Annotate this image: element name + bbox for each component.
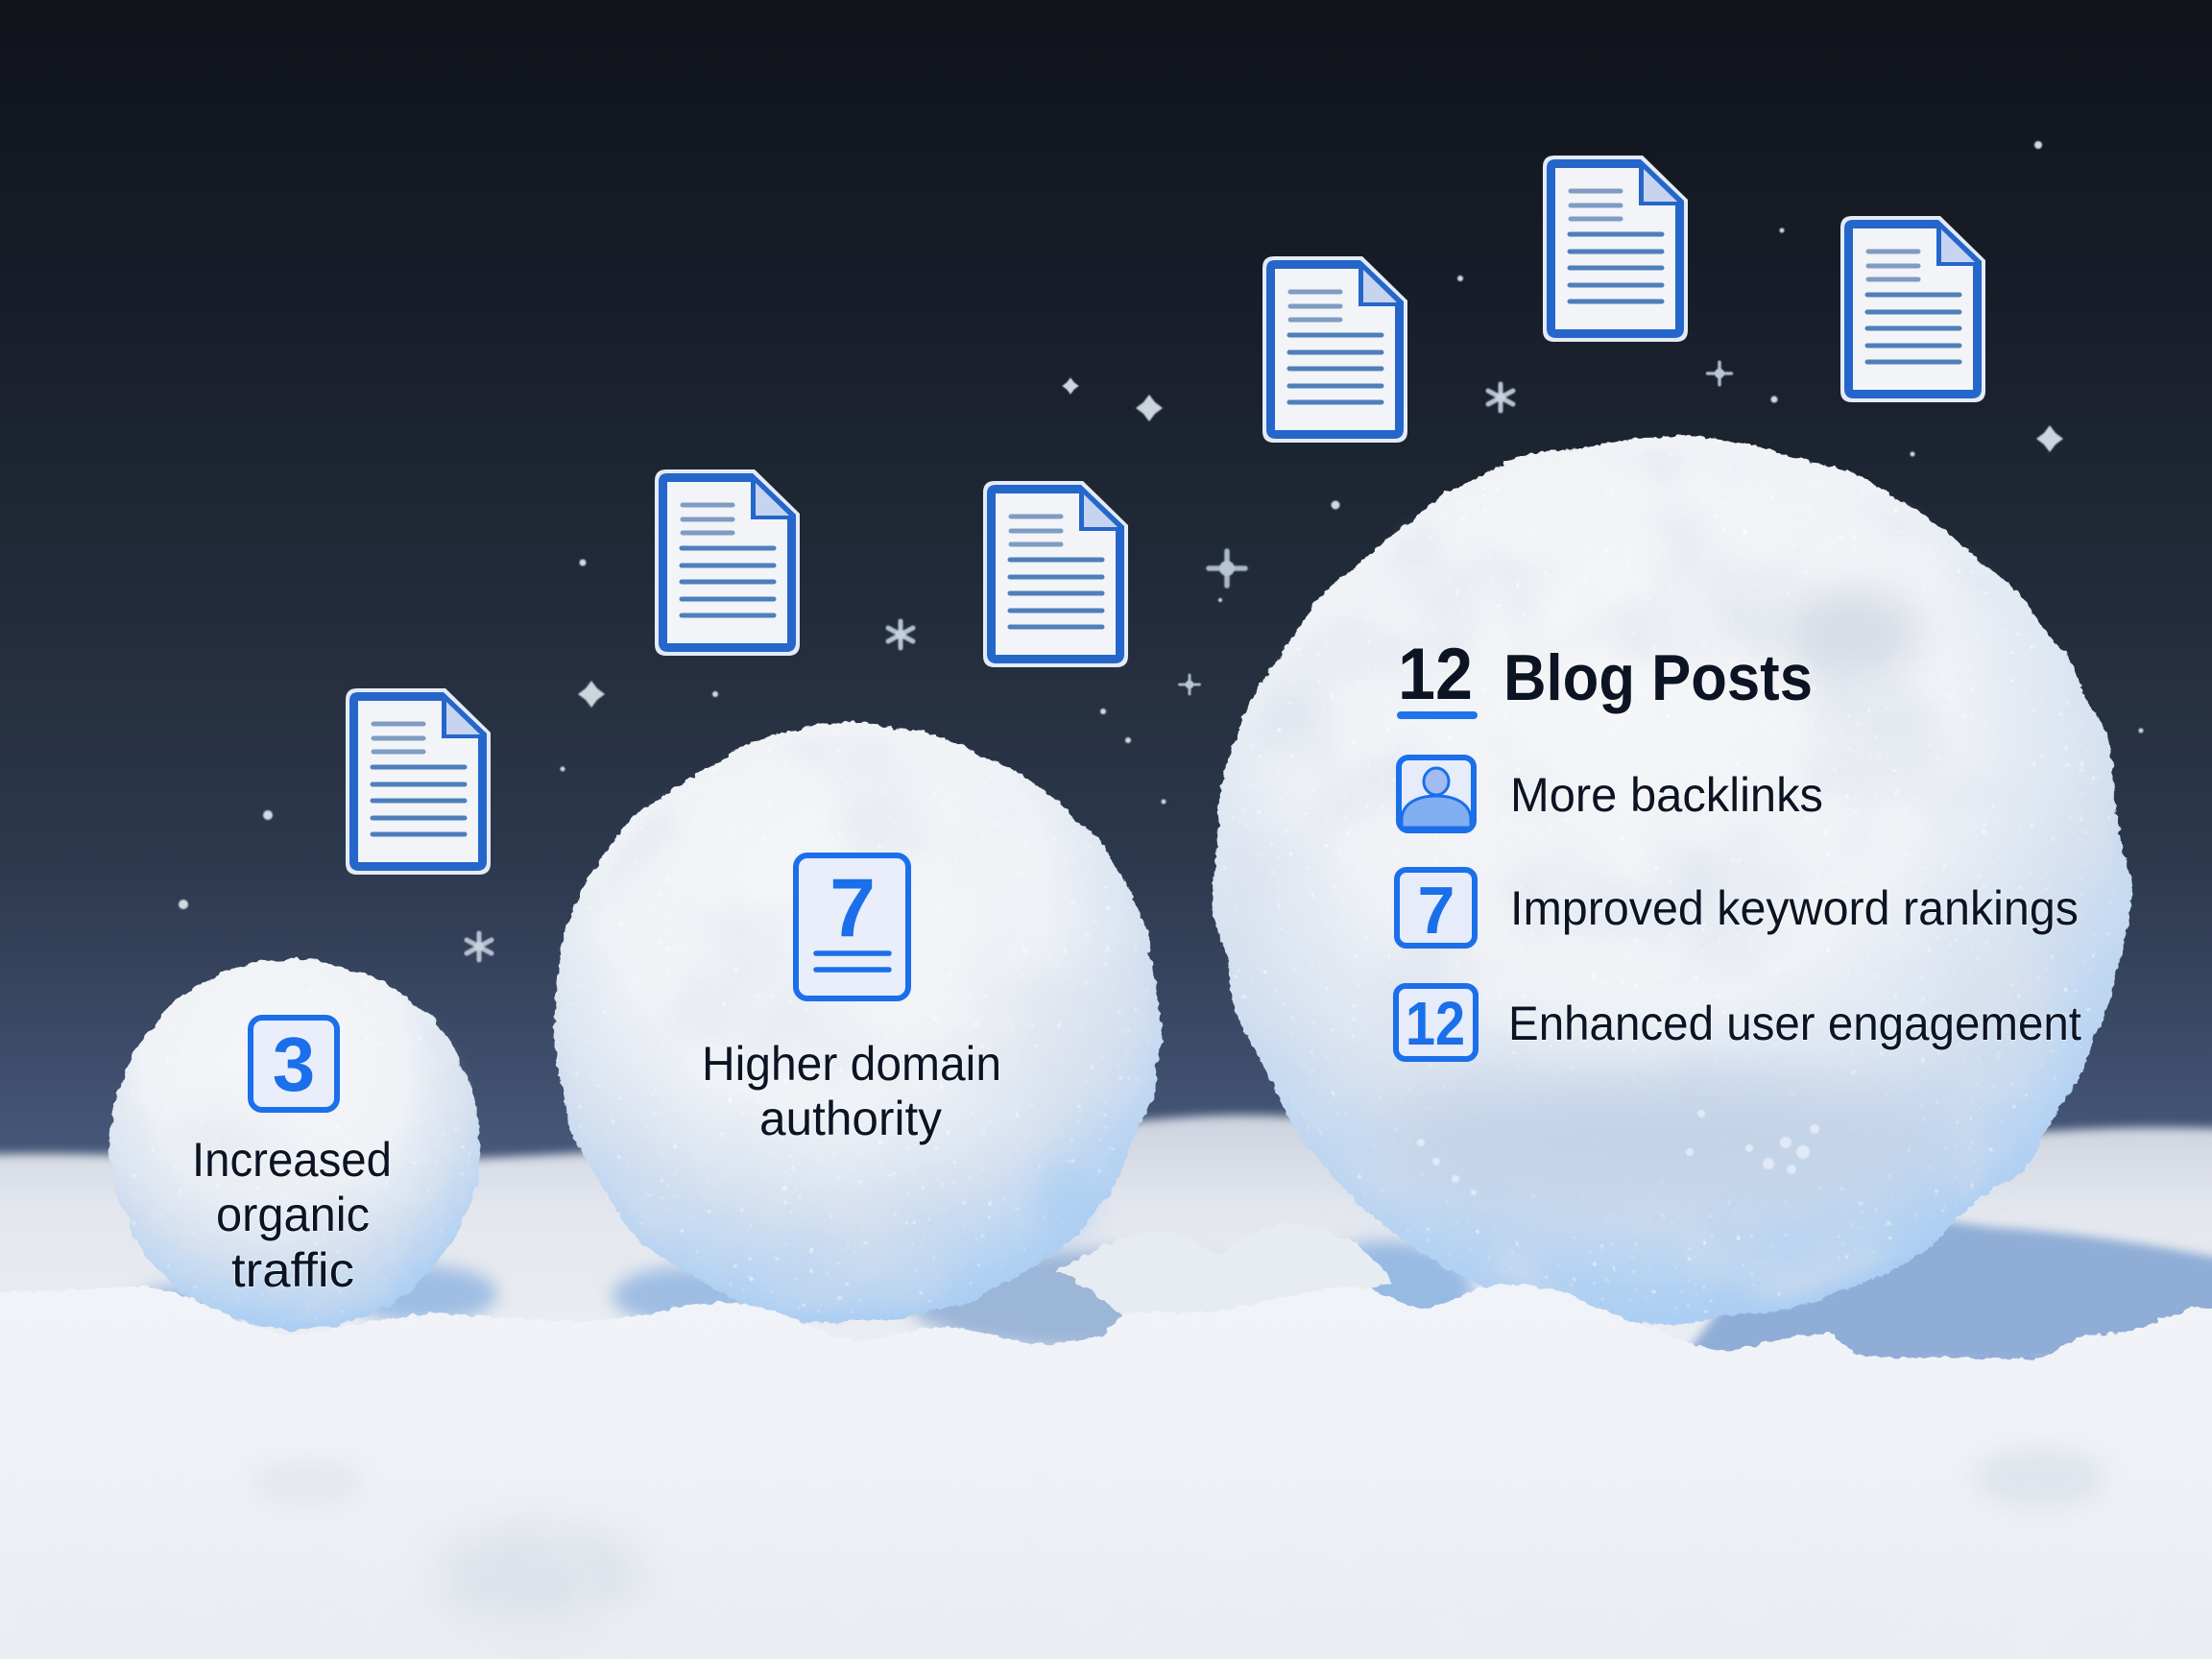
icon: document 1	[346, 688, 491, 875]
callout: small snowball label	[192, 1018, 392, 1297]
foreground snow drift	[0, 1285, 2212, 1659]
mid snow mound	[1056, 1224, 1392, 1325]
item: more backlinks	[1399, 757, 1823, 830]
panel: large snowball content	[1396, 634, 2081, 1059]
text: higher domain authority: Higher domain	[702, 1037, 1001, 1091]
ball shadows on snow	[130, 1200, 2212, 1373]
heading: 12 blog posts: 12	[1398, 634, 1473, 715]
text: increased organic traffic: traffic	[231, 1243, 354, 1297]
large snowball	[1214, 437, 2125, 1324]
icon: document 6	[1840, 216, 1985, 402]
item: improved keyword rankings: Improved keyword rankings	[1510, 881, 2079, 935]
text: higher domain authority	[702, 1037, 1001, 1145]
icon: person badge	[1399, 757, 1474, 830]
callout: medium snowball label	[702, 855, 1001, 1145]
icon: number 3 badge: 3	[273, 1022, 315, 1107]
text: higher domain authority: authority	[759, 1092, 942, 1145]
icon: number 7 document badge	[796, 855, 908, 998]
item: improved keyword rankings	[1397, 870, 2079, 948]
icon: number 3 badge	[251, 1018, 337, 1110]
icon: number 7 badge	[1397, 870, 1475, 948]
icon: number 7 document badge: 7	[830, 862, 876, 954]
icon: document 4	[1262, 256, 1407, 443]
heading: 12 blog posts	[1397, 634, 1813, 719]
text: increased organic traffic: organic	[216, 1188, 370, 1241]
item: enhanced user engagement	[1396, 986, 2081, 1059]
distant snowy ground	[0, 1116, 2212, 1659]
icon: number 7 badge: 7	[1418, 873, 1455, 948]
text: increased organic traffic: Increased	[192, 1133, 392, 1187]
icon: number 12 badge: 12	[1406, 989, 1465, 1058]
text: increased organic traffic	[192, 1133, 392, 1297]
item: more backlinks: More backlinks	[1510, 768, 1823, 822]
falling snowflakes	[179, 141, 2143, 960]
icon: document 2	[655, 469, 800, 656]
blog post document icons	[346, 156, 1985, 875]
heading: 12 blog posts: Blog Posts	[1503, 641, 1813, 714]
item: enhanced user engagement: Enhanced user engagement	[1508, 997, 2081, 1050]
medium snowball	[553, 725, 1160, 1324]
icon: document 5	[1543, 156, 1688, 342]
small snowball	[109, 959, 480, 1330]
icon: document 3	[983, 481, 1128, 667]
